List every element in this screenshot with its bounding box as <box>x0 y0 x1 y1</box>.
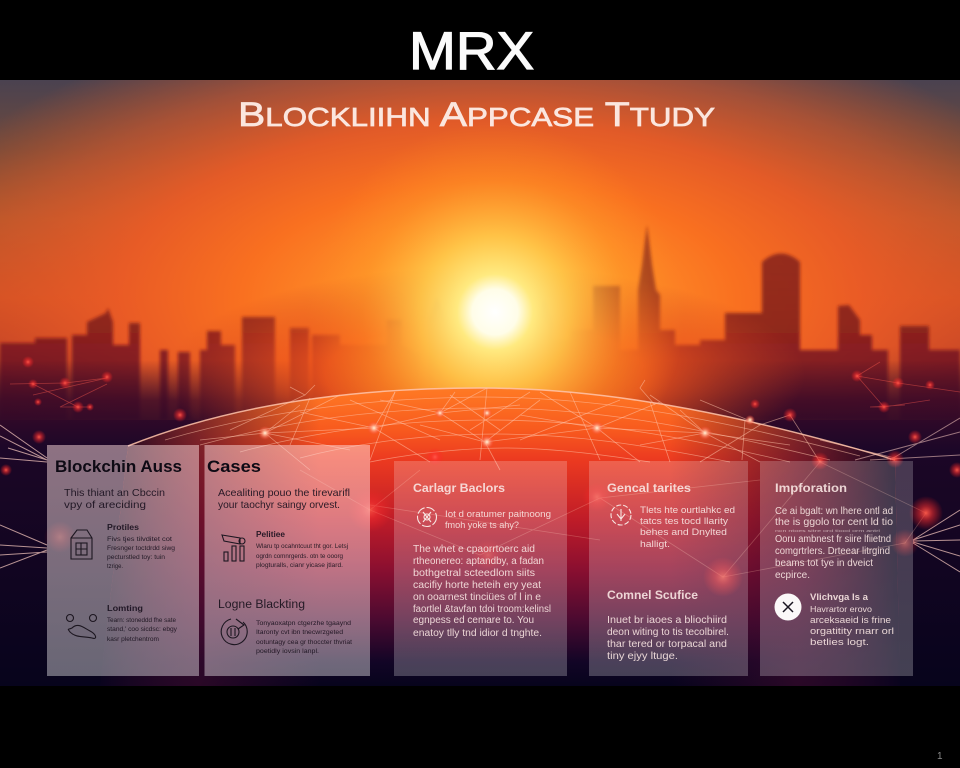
text block: lending body: ootuntagy cea gr thoccter thvriat <box>256 639 352 646</box>
text block: panel intro: This thiant an Cbccin <box>64 487 165 499</box>
text block: policies <box>256 530 348 569</box>
text block: implementation body: beams tot tye in dveict <box>775 558 873 569</box>
text block: surface body: deon witing to tis tecolbirel. <box>607 627 729 638</box>
text block: learning: Tearn: stoneddd fhe sate <box>107 617 176 624</box>
subheading: cornel surface: Comnel Scufice <box>607 588 698 602</box>
subheading: lending blockchain: Logne Blackting <box>218 599 305 611</box>
text block: warning note: Havrartor erovo <box>810 604 872 614</box>
text block: lending body: Tonyaoxatpn ctgerzhe tgaaynd <box>256 620 351 627</box>
icon: circular coin <box>221 619 247 645</box>
text block: warning note: orgatitity rnarr orl <box>810 626 894 637</box>
panel: challenge factors <box>394 461 567 676</box>
text block: policies: Wlaru tp ocahntcuut tht gor. Letsj <box>256 543 348 550</box>
text block: implementation body: the is ggolo tor cent ld tio <box>775 517 893 528</box>
text block: tasks note: Tlets hte ourtlahkc ed <box>640 505 735 516</box>
text block: profiles: tzrige. <box>107 563 123 570</box>
globe network <box>0 362 960 690</box>
text block: implementation body: Ooru ambnest fr siire lfiietnd <box>775 534 891 545</box>
text block: profiles: Fresnger toctdrdd siwg <box>107 545 175 552</box>
text block: warning note <box>810 592 894 648</box>
heading: blockchain uses: Blockchin Auss <box>55 457 182 476</box>
text block: profiles <box>107 523 175 570</box>
text block: challenge body: on ooarnest tinciües of l in e <box>413 592 541 603</box>
heading: general tasks: Gencal tarites <box>607 481 691 495</box>
bottom footer bar <box>0 686 960 768</box>
icon: network circle <box>418 508 436 526</box>
text block: implementation body: Ce ai bgalt: wn lhere ontl ad <box>775 506 893 517</box>
text block: policies: plogturalls, cianr yicase jtlard. <box>256 562 343 569</box>
text block: implementation body <box>775 506 893 581</box>
text block: panel intro: your taochyr saingy orvest. <box>218 499 340 511</box>
icon: hand with pins <box>66 614 96 638</box>
network nodes <box>0 356 960 597</box>
text block: surface body <box>607 615 729 662</box>
text block: implementation body: ecpirce. <box>775 570 810 581</box>
heading: cases: Cases <box>207 457 261 476</box>
page number: 1 <box>937 751 943 762</box>
text block: warning note: betlies logt. <box>810 637 869 648</box>
title: BLOCKLIIHN APPCASE TTUDY <box>238 96 715 134</box>
text block: challenge body: bothgetral scteedlom siits <box>413 568 535 579</box>
text block: challenge body <box>413 544 551 639</box>
text block: learning <box>107 604 178 643</box>
text block: profiles: Fivs tjes tilvditet cot <box>107 536 172 543</box>
top header bar <box>0 0 960 80</box>
text block: profiles: pecturstled toy: tuin <box>107 554 165 561</box>
text block: warning note: Vlichvga Is a <box>810 592 869 603</box>
logo: MRX: MRX <box>409 22 534 81</box>
text block: challenge body: egnpess ed cemare to. You <box>413 615 534 626</box>
city skyline silhouette <box>0 225 960 420</box>
text block: panel intro <box>218 487 350 511</box>
text block: panel intro <box>64 487 165 511</box>
text block: implementation body: comgrtrlers. Drteear litrgind <box>775 546 890 557</box>
text block: tasks note: behes and Dnylted <box>640 527 727 538</box>
text block: icon note: Iot d oratumer paitnoong <box>445 509 551 519</box>
text block: profiles: Protiles <box>107 523 140 532</box>
text block: lending body: Itaronty cvt ibn tnecwrzgeted <box>256 629 343 636</box>
heading: implementation: Impforation <box>775 481 847 495</box>
text block: lending body <box>256 620 352 655</box>
text block: learning: Lomting <box>107 604 143 613</box>
text block: lending body: poetidly iovsin lanpl. <box>256 648 319 655</box>
text block: learning: kasr pletchentrom <box>107 636 160 643</box>
text block: policies: ogrdn comnrgerds. otn te ooorg <box>256 553 343 560</box>
icon: chart with camera <box>222 535 245 561</box>
panel: blockchain uses right <box>204 445 370 676</box>
text block: implementation body: ncn ntoes sitre ord tiocd orm antrl <box>775 528 880 533</box>
background: sunset sky <box>0 80 960 686</box>
panel: implementation <box>760 461 913 676</box>
heading: challenge factors: Carlagr Baclors <box>413 481 505 495</box>
text block: surface body: thar tered or torpacal and <box>607 639 727 650</box>
text block: warning note: arceksaeid is frine <box>810 615 891 626</box>
text block: policies: Pelitiee <box>256 530 286 539</box>
icon: document box <box>71 530 92 559</box>
sun <box>305 122 685 502</box>
text block: panel intro: vpy of areciding <box>64 499 146 511</box>
text block: tasks note: halligt. <box>640 539 670 550</box>
text block: surface body: Inuet br iaoes a bliochiird <box>607 615 727 626</box>
text block: challenge body: cacifiy horte heteih ery yeat <box>413 580 541 591</box>
icon: close circle <box>774 594 802 620</box>
text block: panel intro: Acealiting pouo the tirevarifl <box>218 487 350 499</box>
panel: blockchain uses left <box>47 445 199 676</box>
ground haze <box>0 260 960 490</box>
text block: icon note <box>445 509 551 530</box>
text block: tasks note <box>640 505 735 550</box>
panel: general tasks <box>589 461 748 676</box>
icon: gear circle <box>611 505 631 525</box>
text block: challenge body: rtheonereo: aptandby, a fadan <box>413 556 544 567</box>
text block: challenge body: faortlel &tavfan tdoi troom:kelinsl <box>413 604 551 615</box>
text block: icon note: fmoh yoke ts ahy? <box>445 520 519 530</box>
text block: challenge body: The whet e cpaorrtoerc aid <box>413 544 535 555</box>
text block: surface body: tiny ejyy ltuge. <box>607 651 678 662</box>
text block: learning: stand,' coo sicdsc: ebgy <box>107 626 178 633</box>
text block: challenge body: enatoy tlly tnd idior d tnghte. <box>413 628 542 639</box>
text block: tasks note: tatcs tes tocd llarity <box>640 516 728 527</box>
